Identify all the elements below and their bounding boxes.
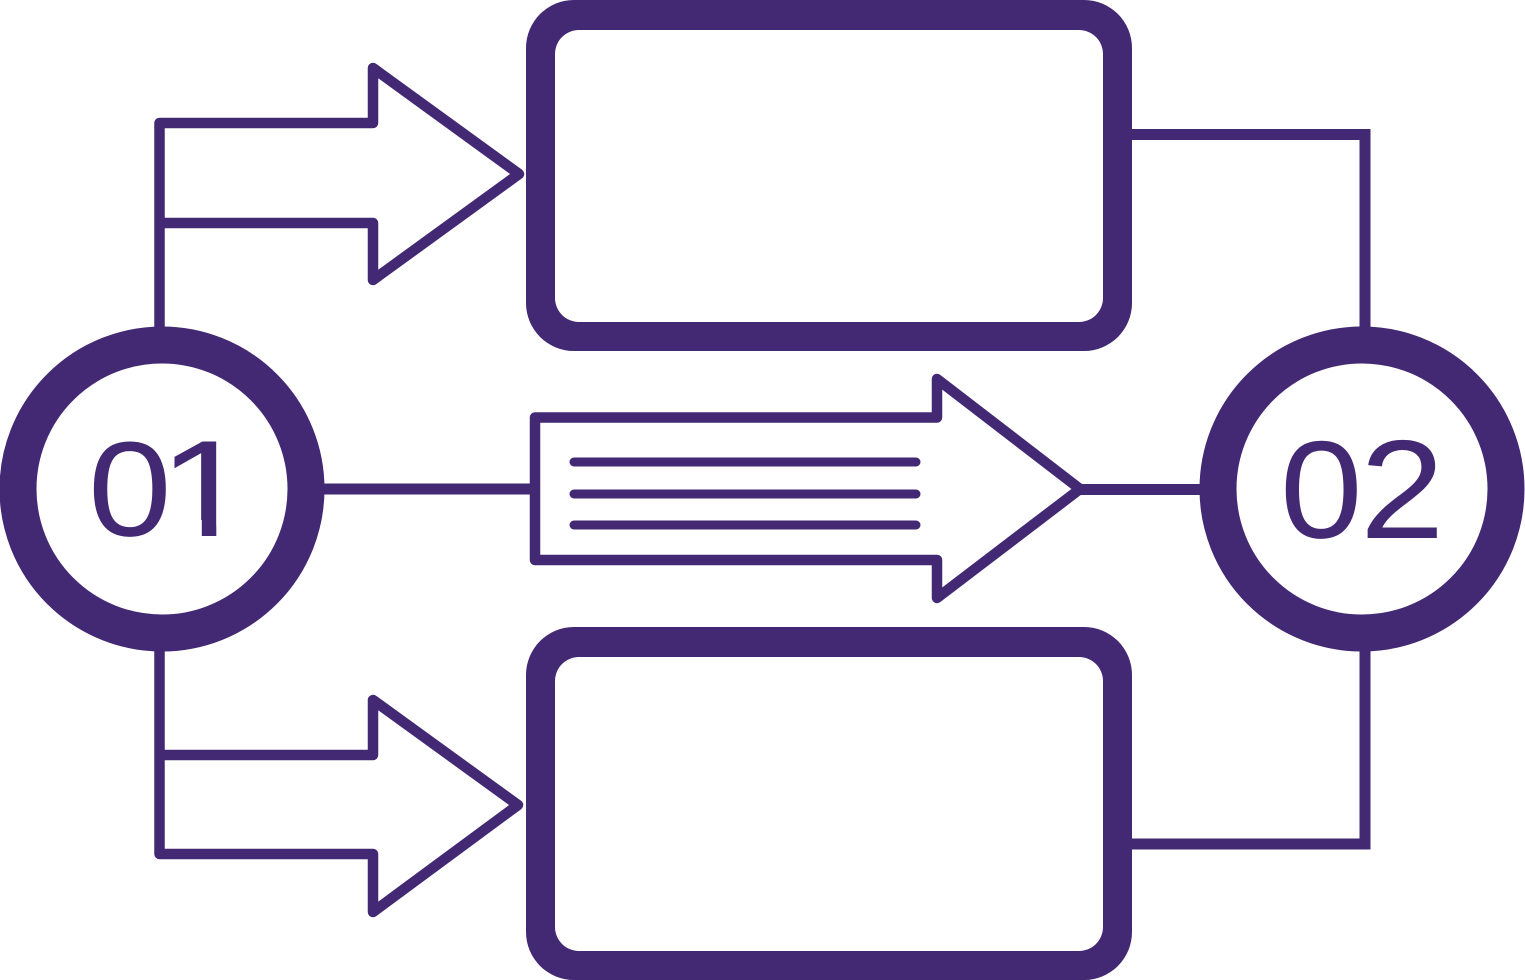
number 01: 0	[88, 415, 172, 565]
connector: circle 01 to center arrow	[320, 484, 535, 494]
text line 3	[574, 520, 916, 530]
circle 02	[1218, 345, 1506, 633]
connector: top box to circle 02	[1128, 134, 1365, 330]
arrow: top left	[160, 68, 519, 330]
number 02	[1280, 412, 1444, 569]
arrow: center	[535, 379, 1080, 598]
number 02: 2	[1360, 412, 1444, 569]
number 01	[94, 442, 216, 537]
text line 2	[574, 490, 916, 498]
number 01: 1	[158, 411, 253, 565]
panel: top box	[526, 0, 1132, 351]
text line 1	[574, 458, 916, 466]
panel: bottom box	[526, 627, 1132, 980]
number 02: 0	[1280, 413, 1363, 567]
arrow: bottom left	[160, 648, 518, 912]
circle 01	[18, 345, 306, 633]
connector: bottom box to circle 02	[1128, 648, 1365, 844]
connector: center arrow to circle 02	[1078, 484, 1205, 495]
